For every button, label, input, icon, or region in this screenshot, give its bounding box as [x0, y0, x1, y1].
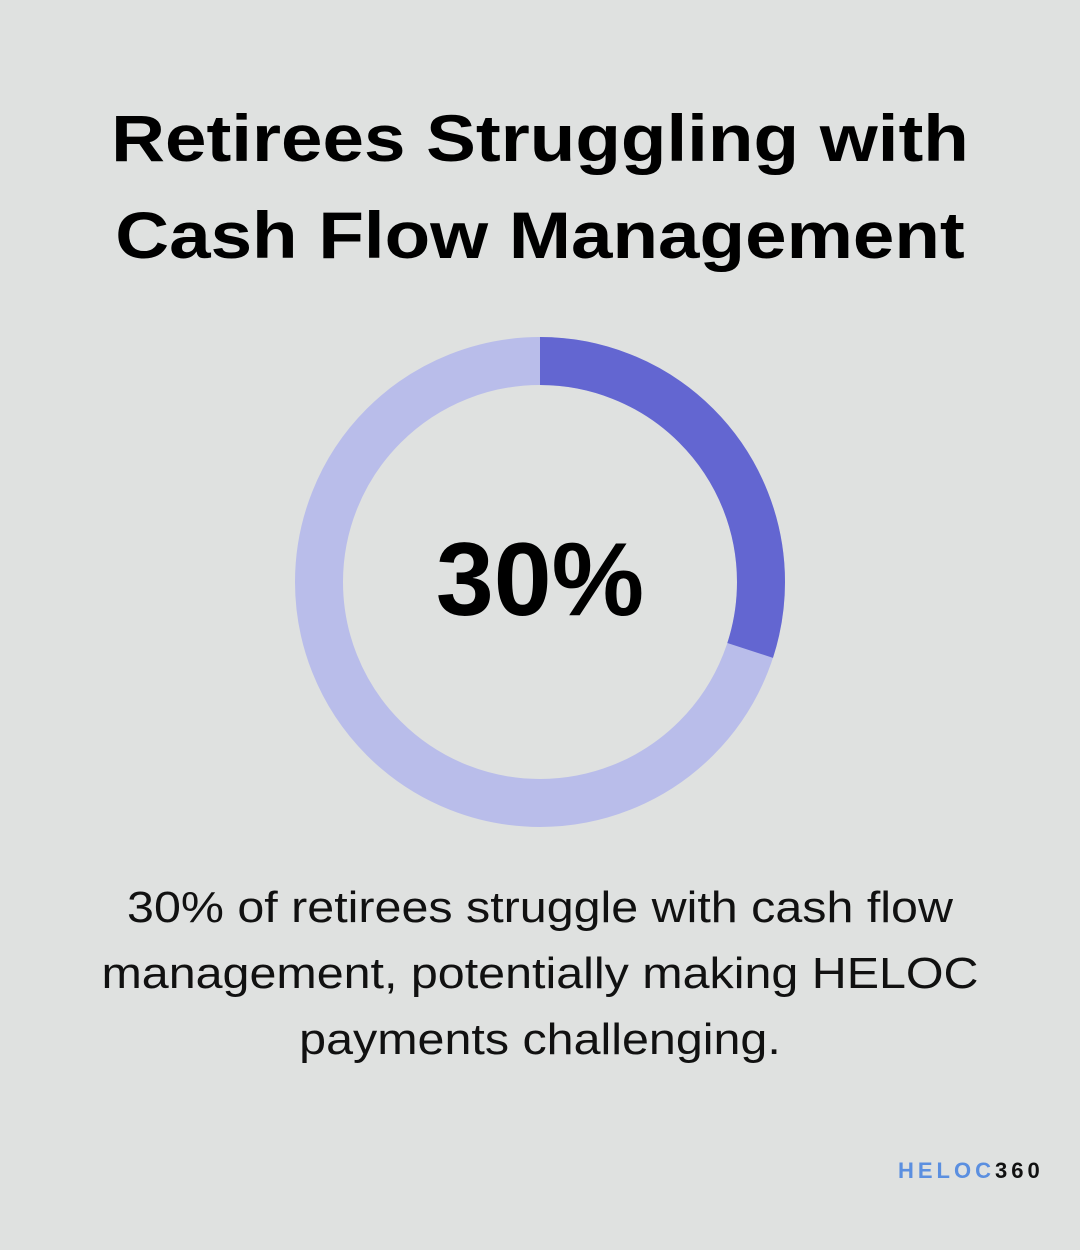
title: Cash Flow Management — [115, 198, 965, 272]
logo: HELOC360 — [898, 1158, 1044, 1183]
description: 30% of retirees struggle with cash flow management, potentially making HELOC payments challenging. — [101, 883, 979, 1064]
title — [111, 101, 969, 272]
title: Retirees Struggling with — [111, 101, 969, 175]
percentage: 30% — [436, 522, 644, 638]
donut chart — [295, 337, 785, 827]
